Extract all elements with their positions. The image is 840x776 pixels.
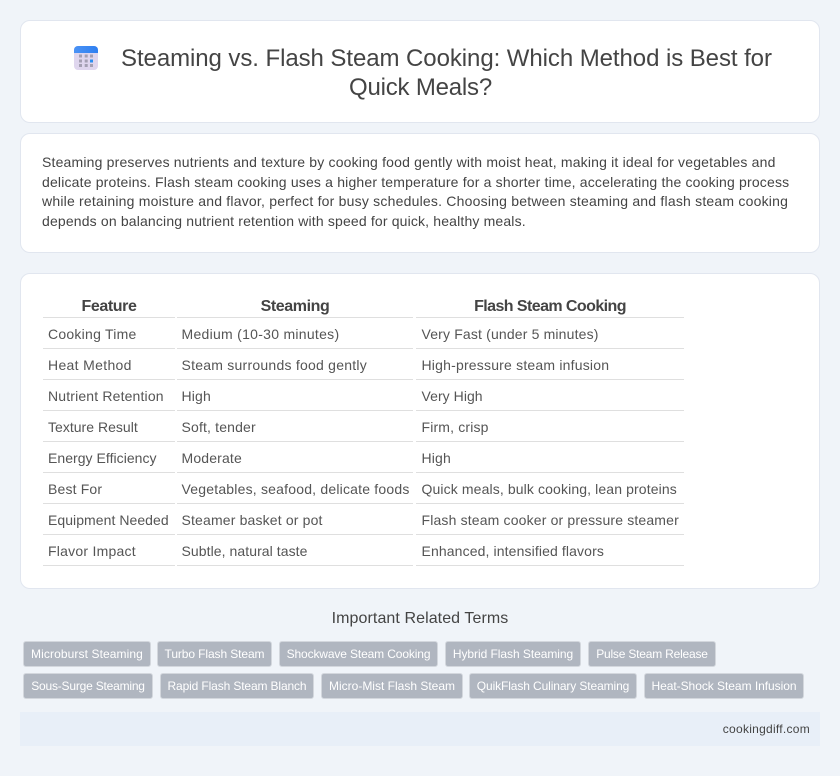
row: nutrient retention: Nutrient Retention (48, 388, 164, 404)
row: nutrient retention (48, 388, 483, 404)
row: heat method: Heat Method (48, 357, 132, 373)
column headers: Flash Steam Cooking (474, 298, 626, 315)
row: texture result (48, 419, 489, 435)
tag (157, 641, 272, 667)
row: energy efficiency: High (422, 450, 451, 466)
intro text: while retaining moisture and flavor, perfect for busy schedules. Choosing between steaming and flash steam cooking (42, 193, 788, 209)
intro text: delicate proteins. Flash steam cooking uses a higher temperature for a shorter time, accelerating the cooking process (42, 174, 789, 190)
footer bar (20, 712, 820, 746)
row: nutrient retention: High (182, 388, 211, 404)
tag (644, 673, 804, 699)
tag: Sous-Surge Steaming (31, 679, 145, 693)
tag: Turbo Flash Steam (165, 647, 264, 661)
intro panel (20, 133, 820, 253)
row: cooking time (48, 326, 599, 342)
row: best for (48, 481, 677, 497)
title (121, 45, 772, 101)
row: energy efficiency: Energy Efficiency (48, 450, 157, 466)
row: texture result: Soft, tender (182, 419, 256, 435)
row: texture result: Firm, crisp (422, 419, 489, 435)
row: heat method (48, 357, 609, 373)
row: best for: Best For (48, 481, 102, 497)
source credit: cookingdiff.com (723, 722, 810, 736)
tag: Pulse Steam Release (596, 647, 708, 661)
tag: QuikFlash Culinary Steaming (477, 679, 629, 693)
tag: Hybrid Flash Steaming (453, 647, 573, 661)
header panel (20, 20, 820, 123)
column headers: Steaming (261, 298, 329, 315)
row: heat method: High-pressure steam infusion (422, 357, 609, 373)
intro text (42, 154, 789, 229)
column headers (82, 298, 626, 315)
row: flavor impact: Flavor Impact (48, 543, 136, 559)
title: Quick Meals? (349, 74, 492, 101)
tag (445, 641, 581, 667)
tag (23, 673, 153, 699)
comparison table (43, 298, 684, 566)
row: best for: Quick meals, bulk cooking, lean proteins (422, 481, 677, 497)
row: cooking time: Cooking Time (48, 326, 137, 342)
row: equipment needed: Flash steam cooker or pressure steamer (422, 512, 679, 528)
tag (469, 673, 637, 699)
column headers: Feature (82, 298, 136, 315)
row: energy efficiency (48, 450, 451, 466)
tag: Shockwave Steam Cooking (287, 647, 430, 661)
row: nutrient retention: Very High (422, 388, 483, 404)
related terms heading: Important Related Terms (332, 610, 508, 627)
title: Steaming vs. Flash Steam Cooking: Which Method is Best for (121, 45, 772, 72)
row: flavor impact: Enhanced, intensified flavors (422, 543, 604, 559)
intro text: depends on balancing nutrient retention with speed for quick, healthy meals. (42, 212, 526, 228)
row: texture result: Texture Result (48, 419, 138, 435)
tag (588, 641, 716, 667)
tag: Rapid Flash Steam Blanch (168, 679, 306, 693)
table panel (20, 273, 820, 589)
tag (321, 673, 463, 699)
tag (160, 673, 314, 699)
intro text: Steaming preserves nutrients and texture by cooking food gently with moist heat, making it ideal for vegetables and (42, 154, 776, 170)
icon: calendar grid (74, 46, 98, 70)
row: flavor impact (48, 543, 604, 559)
tag: Microburst Steaming (31, 647, 143, 661)
tag (279, 641, 438, 667)
row: equipment needed (48, 512, 679, 528)
tag: Micro-Mist Flash Steam (329, 679, 455, 693)
row: cooking time: Medium (10-30 minutes) (182, 326, 339, 342)
related term tags (23, 641, 804, 699)
row: cooking time: Very Fast (under 5 minutes) (422, 326, 599, 342)
row: best for: Vegetables, seafood, delicate foods (182, 481, 410, 497)
row: equipment needed: Steamer basket or pot (182, 512, 323, 528)
row: energy efficiency: Moderate (182, 450, 242, 466)
row: equipment needed: Equipment Needed (48, 512, 169, 528)
tag (23, 641, 151, 667)
tag: Heat-Shock Steam Infusion (651, 679, 797, 693)
row: heat method: Steam surrounds food gently (182, 357, 367, 373)
row: flavor impact: Subtle, natural taste (182, 543, 308, 559)
